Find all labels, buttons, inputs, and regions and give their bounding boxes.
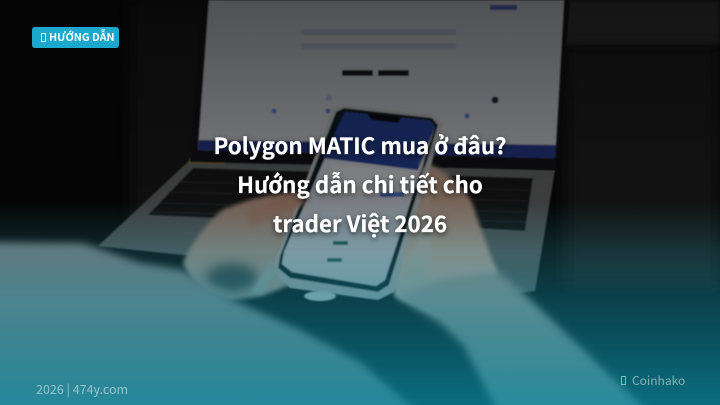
category badge (32, 27, 119, 48)
shirt sleeve left foreground (0, 242, 417, 405)
laptop screen (190, 0, 570, 170)
laptop base and keyboard (98, 158, 555, 293)
title (212, 129, 508, 242)
footer year and domain: 2026 | 474y.com (36, 379, 128, 398)
category badge: HƯỚNG DẪN (49, 29, 115, 45)
forearm right foreground (397, 272, 648, 405)
title: trader Việt 2026 (273, 207, 447, 239)
title: Hướng dẫn chi tiết cho (237, 168, 483, 200)
fingers over phone edge (246, 160, 432, 300)
pinky highlight (304, 291, 336, 301)
right hand behind phone (385, 160, 498, 330)
phone (275, 105, 443, 300)
source brand: Coinhako (632, 372, 685, 389)
title: Polygon MATIC mua ở đâu? (213, 129, 507, 161)
palm shadow (206, 264, 258, 292)
left hand behind phone (183, 192, 318, 300)
